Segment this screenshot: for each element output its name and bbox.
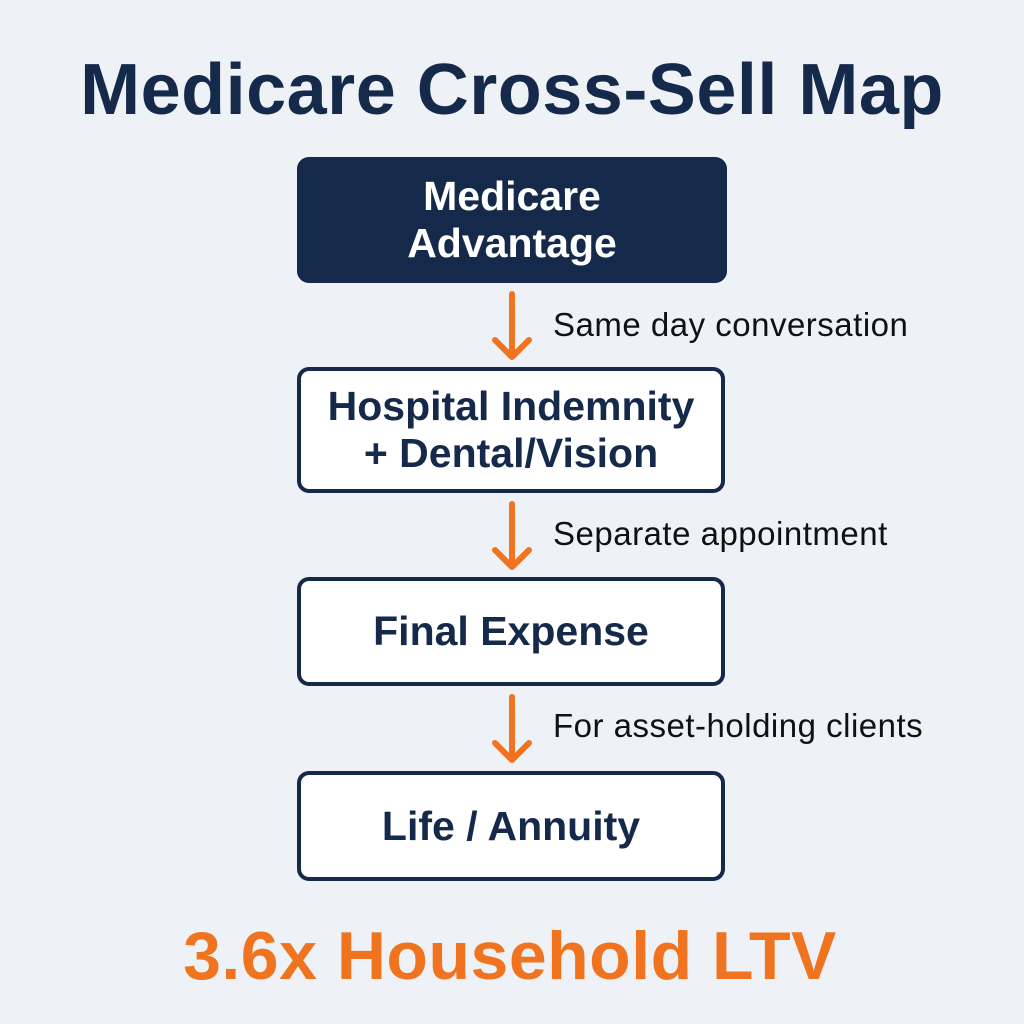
box: life annuity: Life / Annuity <box>382 802 640 848</box>
box: life annuity <box>297 771 725 881</box>
box: final expense <box>297 577 725 686</box>
label 2: Separate appointment <box>553 515 888 552</box>
box: medicare advantage: Medicare <box>423 173 601 219</box>
box: final expense: Final Expense <box>373 608 649 654</box>
arrow 2 <box>492 501 532 570</box>
result: 3.6x Household LTV <box>183 918 837 994</box>
box: hospital indemnity: + Dental/Vision <box>364 430 658 476</box>
box: medicare advantage: Advantage <box>407 220 617 266</box>
box: hospital indemnity: Hospital Indemnity <box>328 383 694 429</box>
title: Medicare Cross-Sell Map <box>80 50 944 130</box>
arrow 1 <box>492 291 532 360</box>
label 3: For asset-holding clients <box>553 707 923 744</box>
arrow 3 <box>492 694 532 763</box>
box: hospital indemnity <box>297 367 725 493</box>
box: medicare advantage <box>297 157 727 283</box>
label 1: Same day conversation <box>553 306 908 343</box>
